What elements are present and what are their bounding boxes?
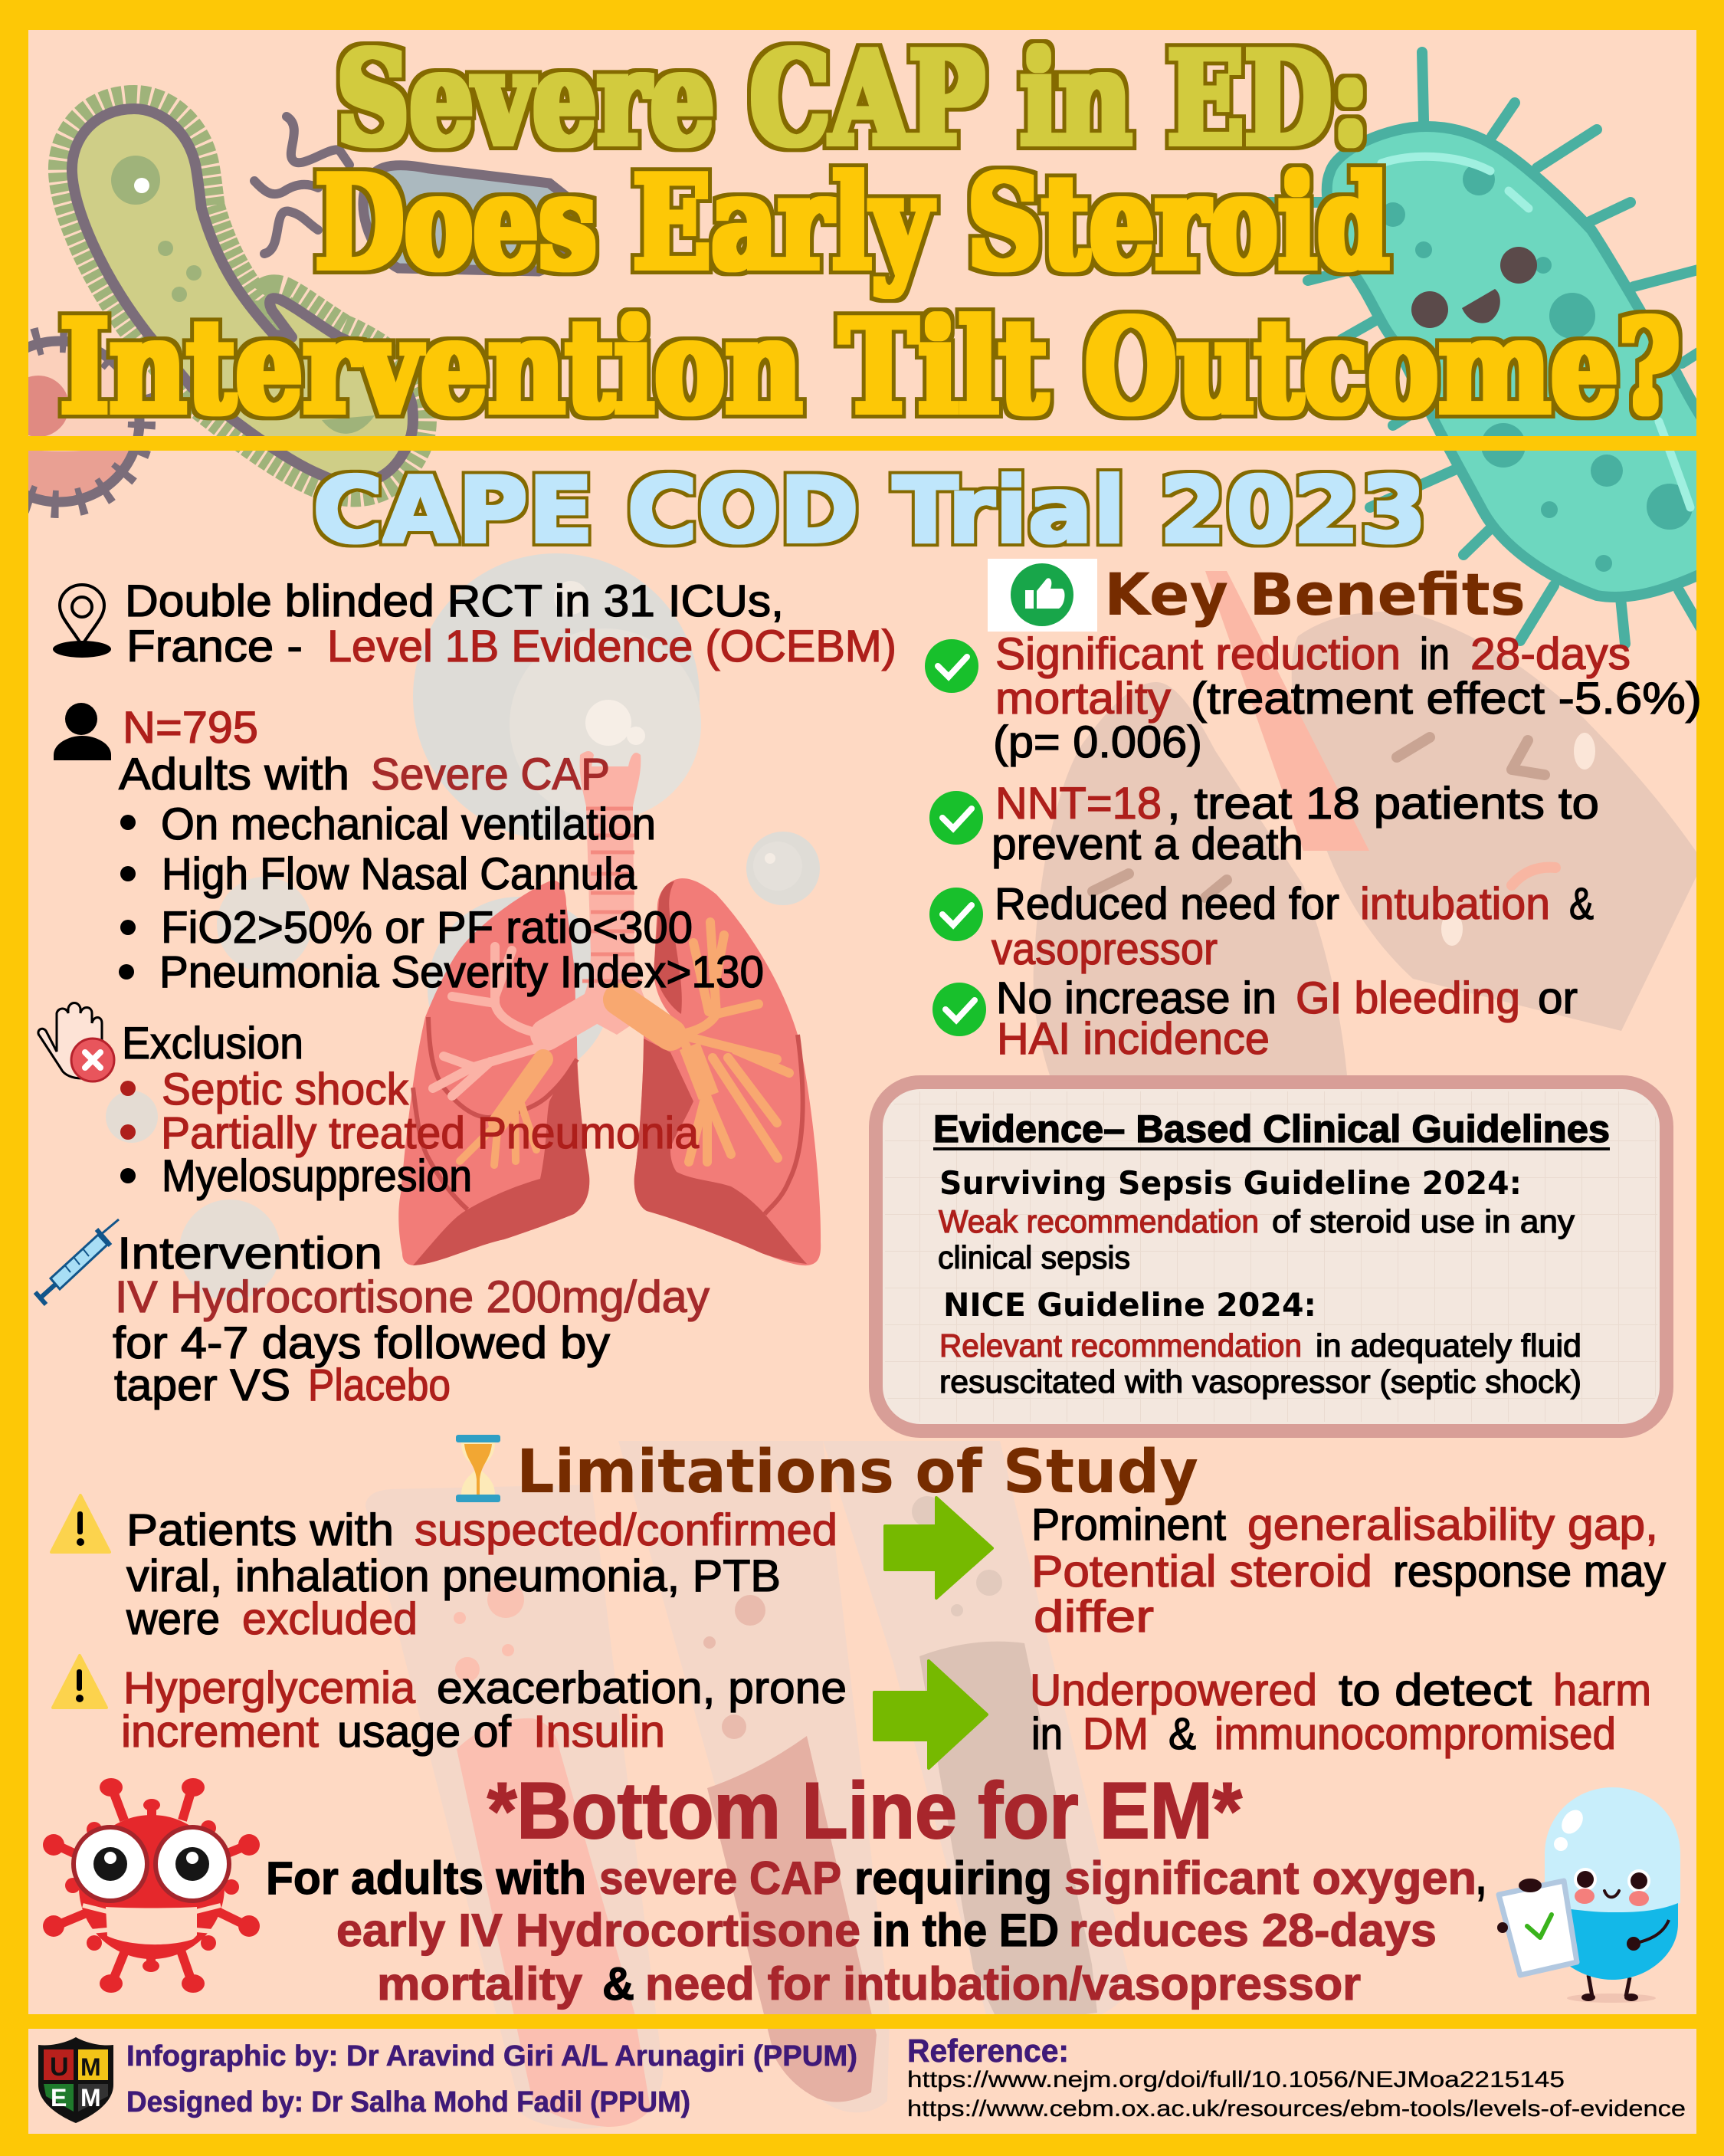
consequence text: underpowered: Underpowered: [1030, 1665, 1317, 1715]
text block: study design: Double blinded RCT in 31 ICUs,: [125, 576, 784, 626]
text block: intervention: IV Hydrocortisone 200mg/day: [115, 1272, 710, 1322]
title: [60, 24, 1680, 442]
heading: limitations: Limitations of Study: [516, 1438, 1198, 1507]
icon: UMEM shield: M: [80, 2084, 101, 2112]
title band divider: [28, 436, 1696, 451]
subtitle: CAPE COD Trial 2023: [313, 458, 1427, 564]
limitation text: hyperglycemia: usage of: [337, 1707, 512, 1757]
text block: exclusion: Exclusion: [122, 1019, 303, 1068]
icon: warning: [53, 1656, 107, 1708]
text block: population: Adults with: [119, 750, 349, 799]
benefit: mortality: (treatment effect -5.6%): [1191, 674, 1702, 724]
bottom line summary: severe CAP: [599, 1852, 841, 1904]
benefit: safety: No increase in: [996, 973, 1277, 1023]
heading: bottom line: *Bottom Line for EM*: [487, 1767, 1242, 1856]
benefit: mortality: in: [1420, 629, 1450, 679]
icon: UMEM shield: [38, 2037, 113, 2123]
benefit: mortality: [925, 629, 1702, 767]
benefit: NNT: NNT=18: [995, 779, 1162, 829]
icon: pill mascot with clipboard: [1497, 1787, 1680, 2003]
text block: population: On mechanical ventilation: [161, 799, 656, 849]
guideline: NICE: [939, 1286, 1581, 1400]
consequence text: underpowered: immunocompromised: [1214, 1709, 1616, 1759]
limitation text: hyperglycemia: exacerbation, prone: [437, 1663, 847, 1713]
consequence text: underpowered: &: [1168, 1709, 1196, 1759]
panel: clinical guidelines: [876, 1082, 1667, 1431]
benefit: mortality: (p= 0.006): [993, 717, 1202, 767]
benefit: safety: HAI incidence: [997, 1014, 1270, 1064]
bottom line summary: in the ED: [872, 1905, 1059, 1956]
limitation text: hyperglycemia: Hyperglycemia: [123, 1663, 416, 1713]
icon: person: [54, 703, 111, 760]
bottom line summary: need for intubation/vasopressor: [645, 1958, 1361, 2010]
title: Severe CAP in ED:: [336, 24, 1369, 174]
text block: population: N=795: [123, 703, 258, 753]
benefit: mortality: 28-days: [1470, 629, 1631, 679]
limitation text: exclusions: Patients with: [126, 1505, 394, 1555]
text block: intervention: [113, 1229, 710, 1410]
text block: study design: Level 1B Evidence (OCEBM): [327, 622, 896, 671]
benefit: intubation: Reduced need for: [995, 879, 1339, 929]
heading: guidelines: Evidence– Based Clinical Guidelines: [933, 1108, 1610, 1150]
benefit: NNT: , treat 18 patients to: [1167, 779, 1599, 829]
benefit: intubation: [929, 879, 1594, 974]
benefit: intubation: vasopressor: [991, 924, 1218, 974]
footer references: https://www.nejm.org/doi/full/10.1056/NEJMoa2215145: [907, 2067, 1565, 2092]
benefit: NNT: [929, 779, 1599, 869]
bottom line summary: ,: [1477, 1852, 1486, 1904]
bottom line summary: reduces 28-days: [1069, 1905, 1437, 1956]
limitation text: hyperglycemia: Insulin: [533, 1707, 665, 1757]
faded lungs illustration right: [1034, 571, 1703, 1075]
arrow: [885, 1498, 992, 1598]
icon: check: [929, 888, 983, 941]
footer references: https://www.cebm.ox.ac.uk/resources/ebm-tools/levels-of-evidence: [907, 2096, 1686, 2122]
guideline: NICE: Relevant recommendation: [939, 1327, 1302, 1363]
icon: check: [925, 639, 978, 693]
icon: red virus mascot: [43, 1778, 260, 1993]
benefit: intubation: intubation: [1360, 879, 1550, 929]
icon: check: [929, 791, 983, 845]
benefit: mortality: Significant reduction: [995, 629, 1401, 679]
consequence text: generalisability: generalisability gap,: [1247, 1500, 1658, 1550]
bottom line summary: [266, 1852, 1486, 2010]
icon: UMEM shield: M: [80, 2053, 101, 2081]
text block: population: FiO2>50% or PF ratio<300: [161, 903, 693, 953]
footer credits: [126, 2040, 857, 2118]
bottom line summary: requiring: [854, 1852, 1052, 1904]
limitation text: exclusions: suspected/confirmed: [415, 1505, 837, 1555]
arrow: [874, 1661, 987, 1768]
gray bacterium: [254, 116, 573, 271]
consequence text: underpowered: in: [1031, 1709, 1063, 1759]
icon: location pin: [53, 585, 111, 658]
limitation text: exclusions: [126, 1505, 837, 1644]
text block: intervention: Intervention: [117, 1229, 382, 1278]
guideline: NICE: in adequately fluid: [1316, 1327, 1581, 1363]
icon: UMEM shield: E: [51, 2084, 67, 2112]
guideline: NICE: resuscitated with vasopressor (septic shock): [939, 1363, 1581, 1400]
lungs illustration: [398, 751, 821, 1265]
consequence text: underpowered: to detect: [1339, 1665, 1532, 1715]
pink virus left: [0, 339, 142, 504]
bottom line summary: &: [602, 1958, 634, 2010]
icon: hourglass: [456, 1435, 500, 1502]
limitation text: hyperglycemia: increment: [121, 1707, 319, 1757]
consequence text: generalisability: Prominent: [1031, 1500, 1226, 1550]
guideline: surviving sepsis: Surviving Sepsis Guideline 2024:: [939, 1164, 1522, 1202]
text block: exclusion: Septic shock: [162, 1065, 409, 1114]
bottom line summary: early IV Hydrocortisone: [336, 1905, 860, 1956]
icon: syringe: [35, 1219, 119, 1304]
benefit: intubation: &: [1569, 879, 1594, 929]
bottom line summary: mortality: [377, 1958, 583, 2010]
limitation text: exclusions: were: [126, 1594, 220, 1644]
limitation text: exclusions: viral, inhalation pneumonia, PTB: [126, 1551, 781, 1601]
consequence text: generalisability: differ: [1034, 1592, 1154, 1642]
text block: study design: France -: [126, 622, 303, 671]
teal bacterium: [1265, 52, 1724, 644]
footer credits: Designed by: Dr Salha Mohd Fadil (PPUM): [126, 2086, 690, 2118]
consequence text: underpowered: harm: [1553, 1665, 1651, 1715]
text block: population: Pneumonia Severity Index>130: [159, 947, 764, 997]
bubbles: [106, 553, 820, 1301]
text block: population: Severe CAP: [371, 750, 610, 799]
consequence text: underpowered: [1030, 1665, 1651, 1759]
consequence text: generalisability: response may: [1393, 1547, 1666, 1596]
icon: thumbs up: [988, 559, 1097, 632]
text block: population: High Flow Nasal Cannula: [162, 849, 637, 899]
bottom line summary: significant oxygen: [1064, 1852, 1477, 1904]
text block: population: [119, 703, 764, 997]
icon: check: [932, 983, 986, 1036]
benefit: safety: or: [1538, 973, 1578, 1023]
benefit: mortality: mortality: [995, 674, 1171, 724]
faded test tubes: [365, 1441, 1129, 2128]
consequence text: generalisability: Potential steroid: [1031, 1547, 1372, 1596]
text block: exclusion: Partially treated Pneumonia: [161, 1108, 700, 1158]
limitation text: exclusions: excluded: [242, 1594, 418, 1644]
text block: exclusion: [120, 1019, 700, 1201]
icon: warning: [51, 1495, 110, 1552]
footer references: [907, 2033, 1686, 2122]
text block: exclusion: Myelosuppresion: [162, 1151, 472, 1201]
green bacterium: [72, 109, 413, 483]
guideline: surviving sepsis: of steroid use in any: [1272, 1203, 1575, 1239]
guideline: NICE: NICE Guideline 2024:: [943, 1286, 1316, 1324]
consequence text: underpowered: DM: [1083, 1709, 1149, 1759]
consequence text: generalisability: [1031, 1500, 1666, 1642]
guideline: surviving sepsis: clinical sepsis: [938, 1239, 1130, 1275]
footer references: Reference:: [907, 2033, 1069, 2069]
icon: UMEM shield: U: [50, 2053, 69, 2082]
title: Does Early Steroid: [315, 148, 1389, 298]
text block: study design: [125, 576, 896, 671]
text block: intervention: taper VS: [114, 1360, 290, 1410]
heading: key benefits: Key Benefits: [1104, 560, 1526, 628]
footer band divider: [28, 2014, 1696, 2029]
benefit: safety: GI bleeding: [1296, 973, 1520, 1023]
guideline: surviving sepsis: [938, 1164, 1575, 1275]
benefit: NNT: prevent a death: [991, 819, 1303, 869]
guideline: surviving sepsis: Weak recommendation: [939, 1203, 1259, 1239]
bottom line summary: For adults with: [266, 1852, 586, 1904]
text block: intervention: for 4-7 days followed by: [113, 1318, 610, 1368]
icon: stop hand: [38, 1003, 114, 1081]
text block: intervention: Placebo: [308, 1360, 451, 1410]
limitation text: hyperglycemia: [121, 1663, 847, 1757]
footer credits: Infographic by: Dr Aravind Giri A/L Arunagiri (PPUM): [126, 2040, 857, 2072]
benefit: safety: [932, 973, 1578, 1064]
